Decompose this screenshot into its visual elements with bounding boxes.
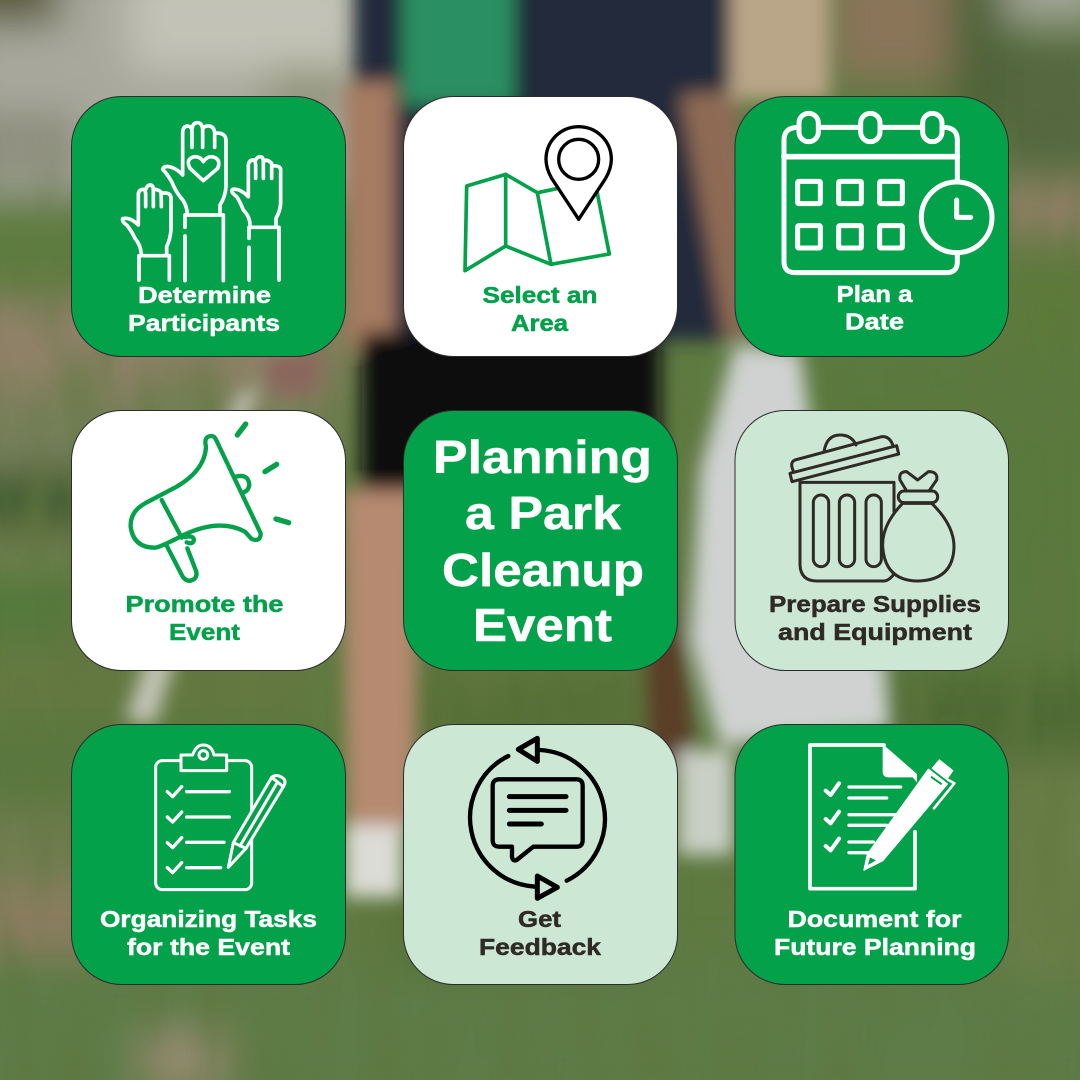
label [774, 906, 976, 960]
title: Planning [433, 431, 652, 483]
label: Participants [128, 310, 280, 336]
panel: Determine Participants [72, 96, 346, 356]
title [433, 431, 652, 651]
panel: Plan a Date [735, 96, 1008, 356]
icon: clipboard checklist and pencil [156, 745, 285, 890]
label: Determine [138, 282, 271, 308]
label: Prepare Supplies [769, 591, 981, 617]
icon: raised hands with heart [122, 123, 281, 281]
label: for the Event [127, 934, 290, 960]
label [100, 906, 317, 960]
label: Area [511, 310, 568, 336]
panel: Promote the Event [72, 410, 346, 670]
title: Cleanup [442, 544, 644, 596]
panel: Document for Future Planning [735, 724, 1008, 984]
panel: Organizing Tasks for the Event [72, 724, 346, 984]
panel: title [404, 410, 678, 670]
panel: Get Feedback [404, 724, 678, 984]
icon: document with checklist and pen [810, 744, 954, 889]
label: Feedback [479, 934, 601, 960]
label: Document for [788, 906, 962, 932]
label [479, 906, 601, 960]
label: Organizing Tasks [100, 906, 317, 932]
label [128, 282, 280, 336]
label [836, 281, 913, 334]
label: Select an [482, 282, 598, 308]
icon: megaphone [131, 424, 289, 581]
label [769, 591, 981, 645]
panel: Select an Area [404, 96, 678, 356]
label: Promote the [126, 591, 284, 617]
label [482, 282, 598, 336]
icon: map with location pin [465, 127, 611, 271]
label: Event [169, 619, 240, 645]
icon: calendar with clock [784, 113, 992, 273]
icon: speech bubble with cycle arrows [470, 738, 605, 898]
label: Future Planning [774, 934, 976, 960]
panel: Prepare Supplies and Equipment [735, 410, 1008, 670]
label: and Equipment [778, 619, 972, 645]
title: Event [473, 599, 612, 651]
icon: trash can and bag [790, 435, 954, 581]
title: a Park [465, 487, 621, 539]
label: Date [845, 308, 904, 334]
label: Plan a [836, 281, 913, 307]
label: Get [518, 906, 561, 932]
label [126, 591, 284, 645]
